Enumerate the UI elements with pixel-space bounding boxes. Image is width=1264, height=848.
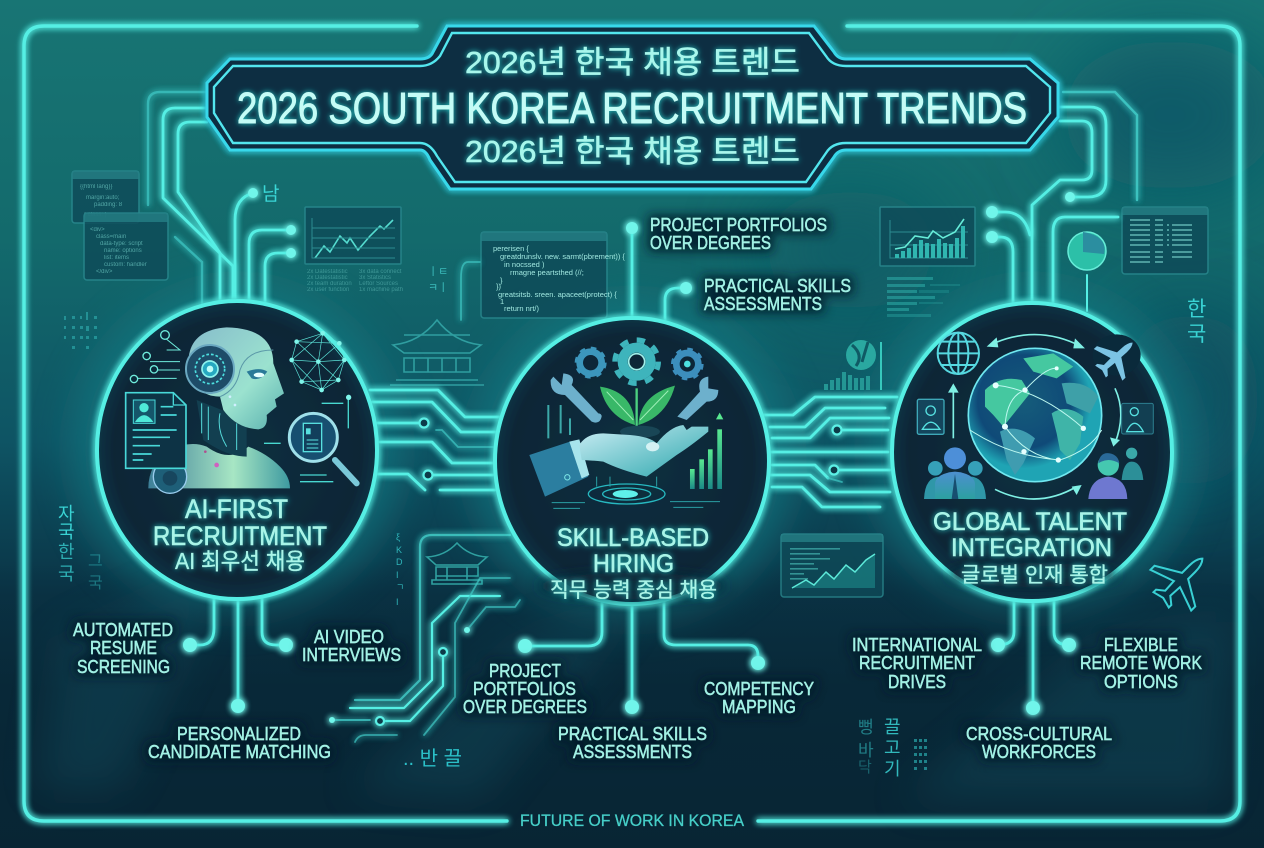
label: international recruitment drives: INTERNATIONAL <box>852 635 982 655</box>
panel: global talent integration <box>892 303 1172 601</box>
circle heading: HIRING <box>593 550 674 578</box>
label: cross-cultural workforces <box>966 724 1112 762</box>
label: project portfolios lower <box>463 661 587 717</box>
deco vertical text: 남 <box>262 183 279 205</box>
label: AI video interviews <box>302 627 401 665</box>
window: code second: name: options <box>104 248 142 254</box>
window: code second: class=main <box>96 234 126 240</box>
label: personalized candidate matching <box>148 724 331 762</box>
ring fade behind text <box>538 573 726 599</box>
deco korean text: 국 <box>88 575 103 592</box>
ring fade behind text <box>947 563 1119 587</box>
window: line chart left <box>305 207 401 264</box>
main heading: 2026 SOUTH KOREA RECRUITMENT TRENDS <box>237 84 1027 133</box>
left to center connectors <box>370 390 500 490</box>
deco korean text: 닥 <box>858 759 872 776</box>
circle heading: 글로벌 인재 통합 <box>961 564 1108 587</box>
window: code second: data-type: script <box>100 241 143 247</box>
plate to left circle traces <box>148 92 296 306</box>
deco korean text: 국 <box>58 522 75 542</box>
right top traces <box>986 92 1137 304</box>
deco korean text: 국 <box>1187 323 1206 346</box>
circle heading <box>153 494 327 574</box>
deco korean text: I <box>396 570 399 580</box>
label: project portfolios top: PROJECT PORTFOLIOS <box>650 215 827 235</box>
panel: AI-first recruitment <box>97 301 377 599</box>
label: flexible remote work options <box>1080 635 1202 692</box>
label: automated resume screening: SCREENING <box>77 657 170 677</box>
deco dot grid lower right <box>914 739 927 770</box>
deco korean text: ξ <box>396 532 400 542</box>
circle heading <box>550 524 717 602</box>
window: code center: pererisen { <box>493 244 529 253</box>
label: automated resume screening: AUTOMATED <box>73 620 173 640</box>
lower left diagonal traces <box>329 535 520 742</box>
circle heading: RECRUITMENT <box>153 521 327 551</box>
chart legend left <box>307 269 403 293</box>
deco korean text: 끌 <box>884 717 901 737</box>
label: automated resume screening <box>73 620 173 677</box>
label: project portfolios lower: PORTFOLIOS <box>473 679 576 699</box>
circle heading: AI 최우선 채용 <box>175 548 305 574</box>
label: competency mapping: MAPPING <box>722 697 796 717</box>
label: practical skills top: ASSESSMENTS <box>704 294 822 314</box>
deco dot matrix <box>64 312 97 349</box>
temple lower <box>427 543 487 584</box>
circle heading: 직무 능력 중심 채용 <box>550 579 717 602</box>
window: code second: custom: handler <box>104 262 147 268</box>
label: practical skills top: PRACTICAL SKILLS <box>704 276 851 296</box>
label: project portfolios top <box>650 215 827 253</box>
label: project portfolios top: OVER DEGREES <box>650 233 771 253</box>
circle heading: SKILL-BASED <box>557 524 709 552</box>
window: code top left: { class: } <box>84 212 107 218</box>
lower traces: skills <box>518 600 765 714</box>
center to right connectors <box>762 397 897 507</box>
label: cross-cultural workforces: CROSS-CULTURAL <box>966 724 1112 744</box>
window: code top left <box>72 171 139 223</box>
title plate <box>207 26 1058 189</box>
deco korean text: D <box>396 557 403 567</box>
center top traces <box>461 222 692 326</box>
deco korean text: 한 <box>1187 298 1206 321</box>
label: personalized candidate matching: PERSONALIZED <box>177 724 301 744</box>
label: automated resume screening: RESUME <box>90 638 157 658</box>
heading korean top: 2026년 한국 채용 트렌드 <box>465 45 800 80</box>
temple top <box>390 320 484 385</box>
window: code center: 1 <box>500 297 504 306</box>
label: international recruitment drives <box>852 635 982 692</box>
illustration: robot with resume <box>126 327 357 493</box>
deco korean text: 바 <box>858 741 874 760</box>
window: bar chart right <box>880 207 975 266</box>
window: code center: } <box>500 276 503 285</box>
window: code top left: margin:auto; <box>86 195 120 201</box>
deco korean text: 자 <box>58 504 75 524</box>
window: code second <box>84 213 168 280</box>
label: competency mapping: COMPETENCY <box>704 679 814 699</box>
chart legend left: 2x Datestatistic <box>307 269 348 275</box>
window: code center: in nocssed ) <box>504 260 545 269</box>
label: international recruitment drives: RECRUITMENT <box>859 653 975 673</box>
deco vertical text <box>262 183 448 294</box>
window: code second: list: items <box>104 255 129 261</box>
window: table right <box>1122 207 1208 274</box>
deco korean text: 국 <box>58 564 75 584</box>
legend bars right <box>887 277 960 317</box>
label: personalized candidate matching: CANDIDATE MATCHING <box>148 742 331 762</box>
lower traces: AI <box>183 597 293 713</box>
lower traces: global <box>991 598 1076 715</box>
decorative windows and charts <box>58 171 1223 779</box>
label: AI video interviews: INTERVIEWS <box>302 645 401 665</box>
window: code center: rmagne peartsthed (//; <box>510 268 584 277</box>
deco vertical text: ㅣㅌ <box>428 266 448 278</box>
window: code top left: padding: 8 <box>94 202 123 208</box>
chart legend left: 2x team duration <box>307 281 352 287</box>
label: practical skills top <box>704 276 851 314</box>
illustration: hand, plant and gears <box>529 340 723 508</box>
window: code center: greatdrunslv. new. sarmt(pbrement)) { <box>500 252 625 261</box>
deco korean text: 그 <box>88 553 103 570</box>
panel: skill-based hiring <box>495 318 769 604</box>
window: area chart lower <box>781 534 883 597</box>
label: flexible remote work options: FLEXIBLE <box>1104 635 1178 655</box>
circle heading: INTEGRATION <box>951 534 1112 562</box>
chart legend left: 3x Statistics <box>359 275 391 281</box>
plate shape <box>207 26 1058 189</box>
circuit lines <box>148 92 1137 742</box>
chart legend left: 1x machine path <box>359 287 403 293</box>
window: code second: <div> <box>90 227 105 233</box>
icon: airplane outline lower right <box>1141 538 1223 620</box>
label: project portfolios lower: OVER DEGREES <box>463 697 587 717</box>
deco korean text: 한 <box>58 542 75 562</box>
deco korean text: 고 <box>884 738 901 758</box>
deco korean text: 기 <box>884 759 901 779</box>
circle heading: GLOBAL TALENT <box>933 508 1127 536</box>
label: cross-cultural workforces: WORKFORCES <box>982 742 1096 762</box>
label: project portfolios lower: PROJECT <box>489 661 561 681</box>
label: AI video interviews: AI VIDEO <box>314 627 384 647</box>
chart legend left: 3x data connect <box>359 269 402 275</box>
label: practical skills lower: ASSESSMENTS <box>573 742 692 762</box>
chart legend left: 2x Datestatistic <box>307 275 348 281</box>
illustration: globe, plane and people <box>917 327 1153 499</box>
circle heading: AI-FIRST <box>185 494 288 524</box>
ring <box>892 303 1172 601</box>
window: code second: </div> <box>96 269 113 275</box>
label: international recruitment drives: DRIVES <box>888 672 946 692</box>
deco korean text: .. 반 끌 <box>403 747 462 770</box>
footer label: FUTURE OF WORK IN KOREA <box>520 811 745 830</box>
label: practical skills lower: PRACTICAL SKILLS <box>558 724 707 744</box>
deco korean text: I <box>396 597 399 607</box>
label: competency mapping <box>704 679 814 717</box>
window: code center: greatsitsb. sreen. apaceet(protect) { <box>498 290 617 299</box>
deco korean text: ㄱ <box>396 582 404 592</box>
deco vertical text: ㅋㅣ <box>428 282 448 294</box>
circle heading <box>933 508 1127 587</box>
deco korean text <box>58 298 1206 779</box>
label: practical skills lower <box>558 724 707 762</box>
chart legend left: 2x user function <box>307 287 349 293</box>
deco korean text: K <box>396 545 402 555</box>
label: flexible remote work options: REMOTE WORK <box>1080 653 1202 673</box>
ring <box>97 301 377 599</box>
window: code top left: {{html lang}} <box>80 184 112 190</box>
window: code center <box>481 232 625 318</box>
heading korean bottom: 2026년 한국 채용 트렌드 <box>465 134 800 169</box>
window: code center: }) <box>496 282 502 291</box>
icon: mini globe and bars <box>824 340 882 390</box>
window: code center: return nrt/) <box>504 304 540 313</box>
deco korean text: 뻥 <box>858 718 874 737</box>
ring <box>495 318 769 604</box>
label: flexible remote work options: OPTIONS <box>1104 672 1178 692</box>
icon: pie and stem <box>1068 232 1106 311</box>
chart legend left: Leftor Sources <box>359 281 398 287</box>
